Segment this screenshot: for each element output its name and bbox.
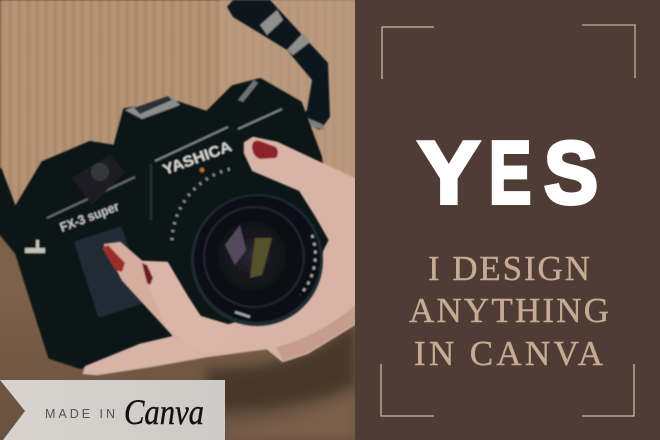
subheading: I design anything in Canva: IN CANVA [414, 334, 604, 373]
camera body [0, 80, 330, 367]
middle finger [143, 262, 233, 354]
camera strap [227, 0, 330, 130]
hand and fingers [84, 138, 356, 374]
badge text: Canva logo: Canva [124, 392, 204, 432]
index finger [105, 243, 178, 340]
lens [191, 194, 323, 326]
subheading: I design anything in Canva: I DESIGN [428, 249, 590, 288]
lower blurred sweater [0, 225, 356, 440]
corner bracket: bottom left [381, 364, 434, 416]
camera model text: FX-3 super [58, 199, 121, 235]
heading: YES [418, 123, 598, 223]
heading: YES: E [489, 125, 531, 223]
corner bracket: top right [582, 25, 635, 78]
photo: hand holding camera against sweater [0, 0, 356, 440]
subheading: I design anything in Canva: ANYTHING [409, 291, 609, 330]
badge text: made in: MADE IN [45, 407, 115, 421]
heading: YES: S [544, 123, 598, 222]
badge: made in Canva [0, 380, 225, 440]
fingernails [102, 141, 278, 285]
palm and thumb [84, 138, 356, 374]
corner bracket: bottom right [582, 364, 634, 416]
subheading: I design anything in Canva [409, 249, 609, 373]
right panel [355, 0, 660, 440]
heading: YES: Y [418, 124, 480, 223]
camera brand text: YASHICA [161, 138, 234, 179]
corner bracket: top left [382, 27, 434, 79]
